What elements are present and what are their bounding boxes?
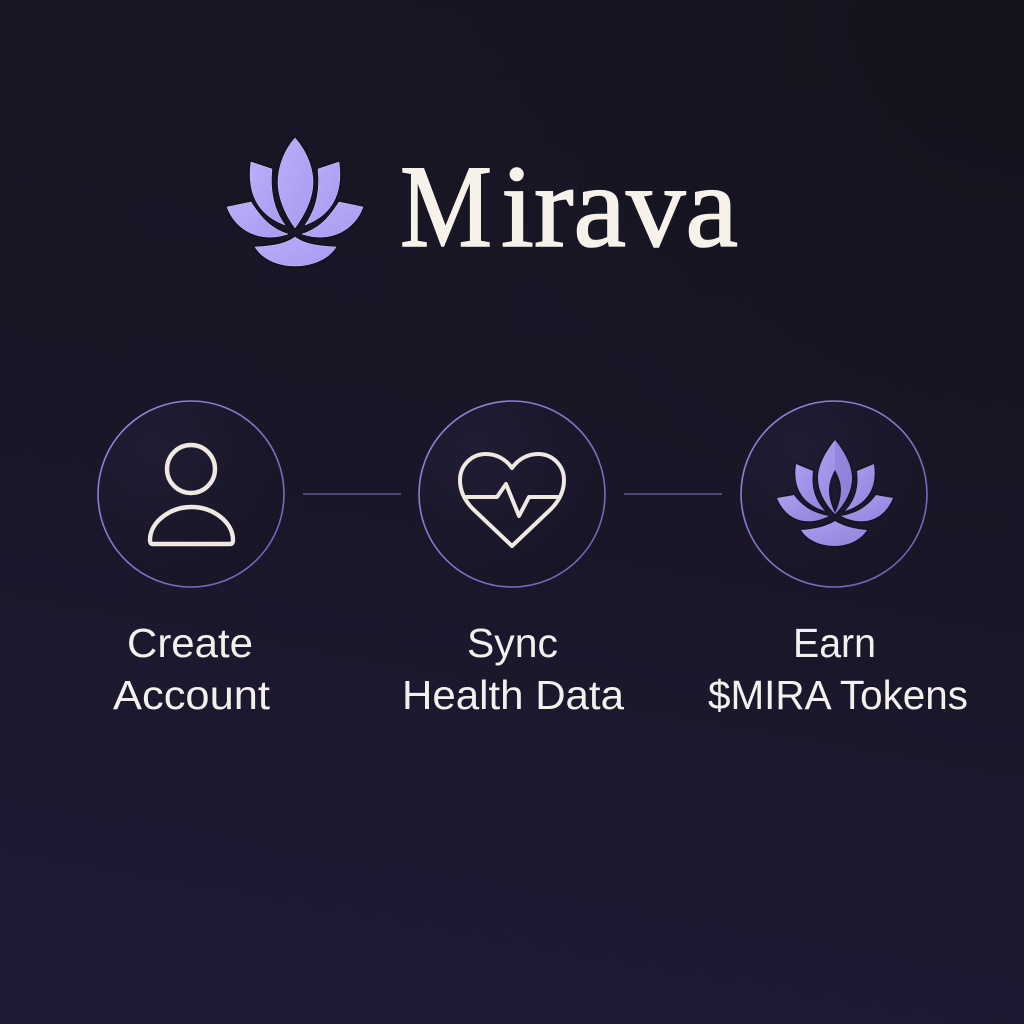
darker right half of centre petal [835,440,852,514]
step 2 circle [419,401,605,587]
title: irava [501,141,738,272]
icon: person [150,445,233,544]
label: create account: Create [127,620,253,666]
icon: lotus token [777,440,893,546]
step 3 circle [741,401,927,587]
label: sync health data: Sync [467,620,558,666]
label: create account: Account [113,672,271,718]
connector 1 [303,493,401,495]
step 1 circle [98,401,284,587]
label: sync health data [402,620,624,718]
step 2: sync health data [402,401,624,718]
label: earn $MIRA tokens: $MIRA Tokens [708,672,968,718]
logo: lotus icon [227,138,363,266]
connector 2 [624,493,722,495]
label: earn $MIRA tokens: Earn [793,620,876,666]
label: create account [113,620,271,718]
step 1: create account [98,401,284,718]
label: earn $MIRA tokens [708,620,968,718]
icon: heart with pulse [460,454,564,546]
step 3: earn tokens [708,401,968,718]
label: sync health data: Health Data [402,672,624,718]
title: M [400,141,492,272]
